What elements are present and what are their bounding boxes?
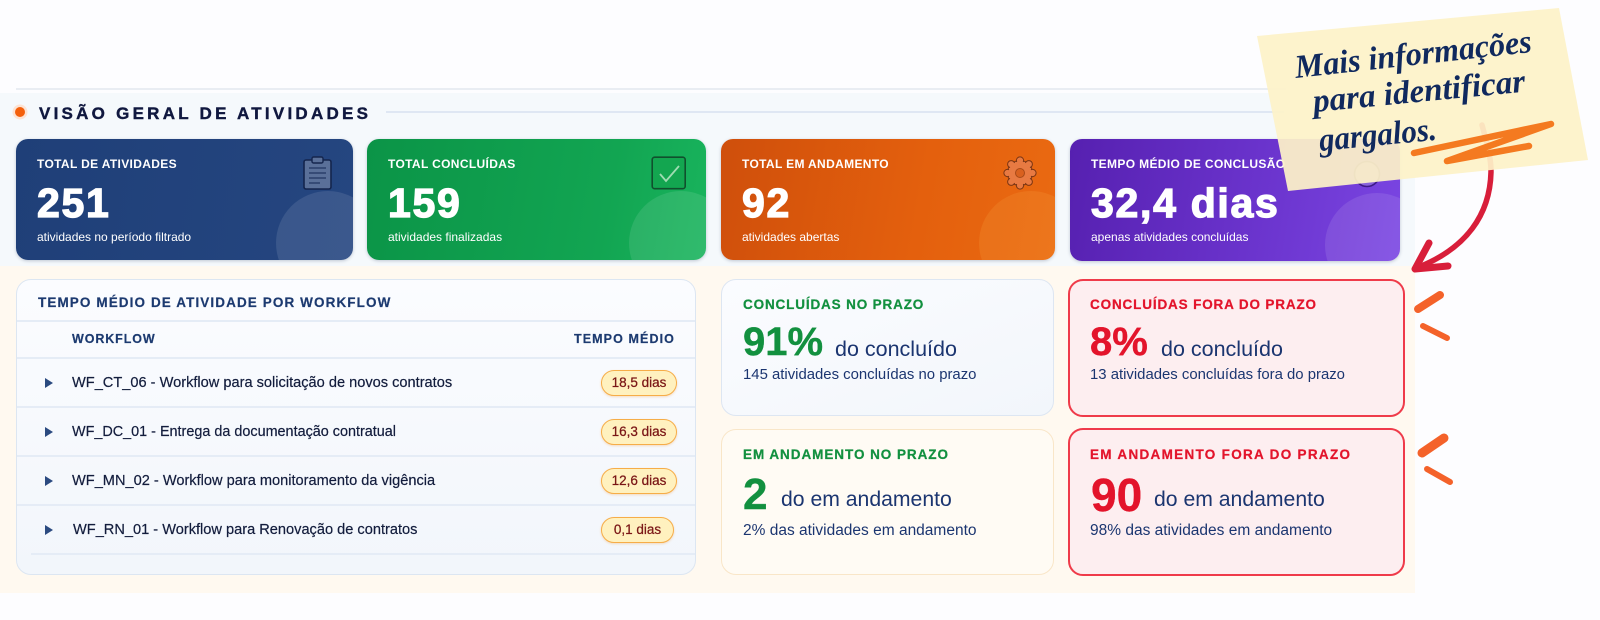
- icon: gear: [1003, 156, 1037, 190]
- expand arrow: [45, 427, 53, 437]
- duration pill: [601, 370, 677, 396]
- value: 251: [37, 180, 111, 226]
- description: do concluído: [1161, 337, 1283, 361]
- description: do em andamento: [781, 488, 952, 511]
- value: 91%: [743, 320, 823, 364]
- duration pill: 12,6 dias: [612, 473, 666, 488]
- caption: atividades abertas: [742, 230, 839, 244]
- stat card: em andamento no prazo: [721, 429, 1054, 575]
- column header: workflow: WORKFLOW: [72, 332, 156, 346]
- attention sparks: [1418, 295, 1450, 482]
- note: 2% das atividades em andamento: [743, 522, 977, 539]
- expand arrow: [45, 476, 53, 486]
- top rule: [16, 88, 1286, 90]
- section heading: [12, 104, 1272, 123]
- caption: atividades finalizadas: [388, 230, 502, 244]
- note: 145 atividades concluídas no prazo: [743, 367, 976, 383]
- sticky note: [1257, 8, 1588, 191]
- duration pill: 0,1 dias: [614, 522, 661, 537]
- heading dot: [15, 107, 25, 117]
- label: EM ANDAMENTO NO PRAZO: [743, 447, 949, 462]
- workflow name: WF_MN_02 - Workflow para monitoramento da vigência: [72, 473, 435, 489]
- description: do em andamento: [1154, 488, 1325, 511]
- KPI card: total concluídas: [367, 139, 706, 260]
- note: 13 atividades concluídas fora do prazo: [1090, 367, 1345, 383]
- note text: para identificar: [1308, 64, 1528, 120]
- caption: atividades no período filtrado: [37, 230, 191, 244]
- note: 98% das atividades em andamento: [1090, 522, 1332, 539]
- KPI card: total em andamento: [721, 139, 1055, 260]
- label: TOTAL CONCLUÍDAS: [388, 157, 516, 171]
- label: CONCLUÍDAS FORA DO PRAZO: [1090, 297, 1317, 312]
- description: do concluído: [835, 337, 957, 361]
- label: EM ANDAMENTO FORA DO PRAZO: [1090, 447, 1351, 462]
- heading text: VISÃO GERAL DE ATIVIDADES: [39, 104, 371, 123]
- panel title: TEMPO MÉDIO DE ATIVIDADE POR WORKFLOW: [38, 295, 391, 310]
- panel: tempo médio por workflow: [16, 279, 696, 575]
- workflow name: WF_CT_06 - Workflow para solicitação de novos contratos: [72, 375, 452, 391]
- value: 32,4 dias: [1091, 180, 1280, 226]
- duration pill: [601, 419, 677, 445]
- label: TOTAL DE ATIVIDADES: [37, 157, 177, 171]
- duration pill: [601, 517, 674, 543]
- value: 92: [742, 180, 791, 226]
- duration pill: 18,5 dias: [612, 375, 666, 390]
- icon: check box: [651, 156, 686, 190]
- orange scribble underline: [1414, 124, 1551, 161]
- duration pill: 16,3 dias: [612, 424, 666, 439]
- background band: overview: [0, 93, 1415, 266]
- heading rule: [386, 111, 1284, 113]
- KPI card: tempo médio de conclusão: [1070, 139, 1400, 261]
- expand arrow: [45, 525, 53, 535]
- row 4: [45, 517, 675, 545]
- expand arrow: [45, 378, 53, 388]
- label: CONCLUÍDAS NO PRAZO: [743, 297, 924, 312]
- column header: tempo médio: TEMPO MÉDIO: [574, 332, 675, 346]
- stat card: em andamento fora do prazo: [1068, 428, 1405, 576]
- value: 159: [388, 180, 462, 226]
- arrow to red cards: [1415, 125, 1491, 269]
- label: TOTAL EM ANDAMENTO: [742, 157, 889, 171]
- row 1: [45, 370, 678, 398]
- note text: gargalos.: [1316, 112, 1438, 159]
- workflow name: WF_DC_01 - Entrega da documentação contratual: [72, 424, 396, 440]
- icon: clock: [1358, 182, 1378, 188]
- value: 2: [743, 470, 767, 519]
- stat card: concluídas no prazo: [721, 279, 1054, 416]
- icon: clipboard: [303, 156, 332, 190]
- value: 8%: [1090, 320, 1148, 364]
- row 2: [45, 419, 678, 447]
- note text: Mais informações: [1292, 24, 1533, 86]
- value: 90: [1091, 469, 1142, 521]
- caption: apenas atividades concluídas: [1091, 230, 1248, 244]
- label: TEMPO MÉDIO DE CONCLUSÃO: [1091, 157, 1285, 171]
- stat card: concluídas fora do prazo: [1068, 279, 1405, 417]
- KPI card: total de atividades: [16, 139, 353, 260]
- note text: [1292, 24, 1533, 159]
- workflow name: WF_RN_01 - Workflow para Renovação de contratos: [73, 522, 417, 538]
- row 3: [45, 468, 678, 496]
- background band: details: [0, 266, 1415, 593]
- duration pill: [601, 468, 677, 494]
